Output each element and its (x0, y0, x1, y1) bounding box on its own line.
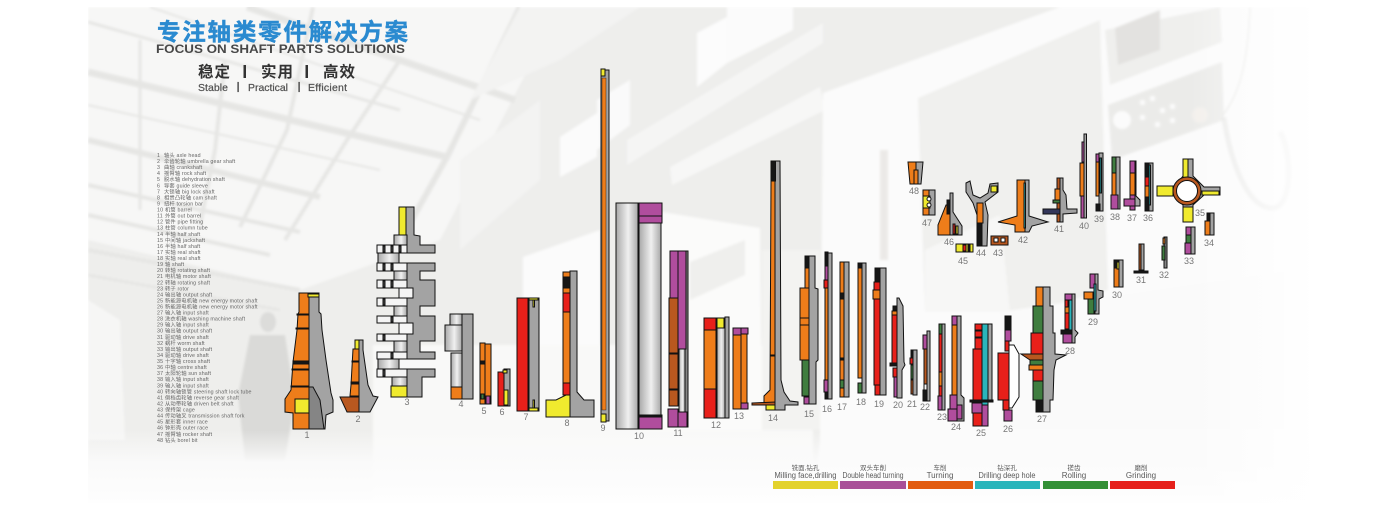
part 10: barrel (616, 203, 662, 441)
parts index list: 驱动轴 drive shaft (165, 333, 209, 341)
parts index list: 输入轴 input shaft (165, 309, 209, 317)
part 45: inner race (956, 244, 973, 266)
parts index list: 转轴 rotating shaft (165, 278, 210, 286)
parts index list: 5 (157, 177, 160, 183)
parts index list: 23 (157, 286, 163, 292)
parts index list: 6 (157, 183, 160, 189)
parts index list (157, 151, 258, 444)
parts index list: 摇臂轴 rock shaft (164, 169, 207, 177)
parts index list: 7 (157, 189, 160, 195)
parts index list: 25 (157, 298, 163, 304)
parts index list: 输出轴 output shaft (165, 290, 213, 298)
part 12: pipe fitting (704, 317, 729, 430)
part 43: cage: 43 (993, 248, 1003, 258)
parts index list: 轴头 axle head (164, 151, 201, 159)
part 41: reverse gear shaft (1043, 178, 1077, 234)
parts index list: 外筒 out barrel (165, 212, 201, 220)
slogan: English keywords: Efficient (308, 82, 347, 94)
legend item: drilling deep hole: 钻深孔 (997, 463, 1017, 472)
parts index list: 轴 shaft (165, 260, 185, 268)
slogan: Chinese keywords: 高效 (323, 62, 355, 81)
title: English heading: FOCUS ON SHAFT PARTS SOLUTIONS (156, 42, 405, 56)
part 24: output shaft (948, 316, 964, 432)
parts index list: 钟形壳 outer race (165, 424, 208, 432)
legend item: double head turning (840, 463, 906, 489)
title: Chinese heading: 专注轴类零件解决方案 (157, 18, 408, 45)
part 5: dehydration shaft: 5 (481, 406, 487, 416)
part 32: worm shaft (1159, 237, 1169, 280)
part 31: drive shaft: 31 (1136, 275, 1146, 285)
parts index list: 45 (157, 420, 163, 426)
part 25: new energy motor shaft (970, 324, 993, 438)
part 16: half shaft: 16 (822, 404, 832, 414)
part 29: input shaft: 29 (1088, 317, 1098, 327)
parts index list: 实轴 real shaft (165, 248, 201, 256)
parts index list: 输入轴 input shaft (165, 321, 209, 329)
legend: processing colours (773, 463, 1175, 489)
parts index list: 11 (157, 214, 163, 220)
legend item: rolling (1043, 463, 1108, 489)
part 40: steering shaft lock tube (1079, 134, 1089, 231)
slogan: Chinese keywords: 实用 (261, 62, 293, 81)
part 19: shaft: 19 (874, 399, 884, 409)
parts index list: 32 (157, 341, 163, 347)
parts index list: 18 (157, 256, 163, 262)
parts index list: 36 (157, 365, 163, 371)
part 3: crankshaft (377, 207, 435, 407)
parts index list: 29 (157, 323, 163, 329)
parts index list: 保持架 cage (165, 406, 195, 414)
part 47: rocker shaft (922, 190, 935, 228)
parts index list: 新能源电机轴 new energy motor shaft (165, 296, 258, 304)
parts index list: 转轴 rotating shaft (165, 266, 210, 274)
part 26: new energy motor shaft (998, 316, 1019, 434)
part 33: output shaft (1184, 227, 1195, 266)
parts index list: 摇臂轴 rocker shaft (165, 430, 213, 438)
parts index list: 10 (157, 208, 163, 214)
part 7: big lock shaft: 7 (523, 412, 529, 422)
part 18: real shaft: 18 (856, 397, 866, 407)
parts index list: 导套 guide sleeve (164, 181, 208, 189)
parts index list: 35 (157, 359, 163, 365)
parts index list: 管件 pipe fitting (165, 218, 203, 226)
legend item: milling face, drilling: Milling face,drilling (774, 471, 836, 480)
part 39: input shaft: 39 (1094, 214, 1104, 224)
parts index list: 37 (157, 371, 163, 377)
parts index list: 42 (157, 402, 163, 408)
part 31: drive shaft (1134, 244, 1148, 285)
parts index list: 新能源电机轴 new energy motor shaft (165, 302, 258, 310)
parts index list: 大锁轴 big lock shaft (164, 187, 215, 195)
slogan: English keywords: Practical (248, 82, 288, 94)
legend item: double head turning: Double head turning (842, 471, 904, 480)
part 46: outer race (938, 193, 962, 247)
slogan: Chinese keywords (198, 62, 355, 81)
parts index list: 3 (157, 165, 160, 171)
parts index list: 31 (157, 335, 163, 341)
part 44: transmission shaft fork (966, 181, 998, 258)
parts index list: 曲轴 crankshaft (164, 163, 203, 171)
parts index list: 机筒 barrel (165, 206, 192, 214)
part 10: barrel: 10 (634, 431, 644, 441)
legend item: rolling: 搓齿 (1068, 463, 1081, 472)
part 34: drive shaft (1204, 213, 1214, 248)
parts index list: 输出轴 output shaft (165, 345, 213, 353)
part 14: half shaft: 14 (768, 413, 778, 423)
part 32: worm shaft: 32 (1159, 270, 1169, 280)
legend item: turning: Turning (927, 471, 953, 480)
parts index list: 转向轴锁管 steering shaft lock tube (165, 387, 252, 395)
parts index list: 输入轴 input shaft (165, 381, 209, 389)
part 5: dehydration shaft (480, 343, 491, 416)
parts index list: 38 (157, 377, 163, 383)
parts index list: 2 (157, 159, 160, 165)
parts index list: 14 (157, 232, 163, 238)
part 45: inner race: 45 (958, 256, 968, 266)
part 36: centre shaft (1143, 163, 1153, 223)
parts index list: 47 (157, 432, 163, 438)
part 33: output shaft: 33 (1184, 256, 1194, 266)
parts index list: 倒档齿轮轴 reverse gear shaft (165, 393, 239, 401)
parts index list: 39 (157, 383, 163, 389)
part 38: input shaft (1110, 157, 1120, 222)
part 13: column tube (733, 328, 748, 421)
part 39: input shaft (1094, 153, 1104, 224)
parts index list: 20 (157, 268, 163, 274)
parts index list: 钻头 borel bit (165, 436, 198, 444)
parts index list: 16 (157, 244, 163, 250)
part 4: rock shaft (445, 314, 473, 409)
parts index list: 电机轴 motor shaft (165, 272, 211, 280)
part 8: cam shaft: 8 (564, 418, 570, 428)
parts index list: 22 (157, 280, 163, 286)
part 22: rotating shaft: 22 (920, 402, 930, 412)
part 13: column tube: 13 (734, 411, 744, 421)
part 18: real shaft (856, 263, 866, 407)
legend item: drilling deep hole (975, 463, 1040, 489)
part 17: real shaft (837, 262, 849, 412)
parts index list: 脱水轴 dehydration shaft (164, 175, 225, 183)
part 25: new energy motor shaft: 25 (976, 428, 986, 438)
parts index list: 输出轴 output shaft (165, 327, 213, 335)
part 27: input shaft: 27 (1037, 414, 1047, 424)
part 9: torsion bar (600, 69, 609, 433)
part 43: cage (991, 236, 1008, 258)
part 37: sun shaft (1124, 161, 1140, 223)
parts index list: 21 (157, 274, 163, 280)
parts index list: 星形套 inner race (165, 418, 208, 426)
parts index list: 1 (157, 153, 160, 159)
parts index list: 洗衣机轴 washing machine shaft (165, 315, 246, 323)
parts index list: 19 (157, 262, 163, 268)
parts index list: 实轴 real shaft (165, 254, 201, 262)
parts index list: 28 (157, 317, 163, 323)
legend item: drilling deep hole: Drilling deep hole (978, 471, 1036, 480)
part 2: umbrella gear shaft: 2 (355, 414, 361, 424)
parts index list: 4 (157, 171, 160, 177)
legend item: grinding: 磨削 (1134, 463, 1148, 472)
slogan: Chinese keywords: 稳定 (198, 62, 230, 81)
parts index list: 44 (157, 414, 163, 420)
parts index list: 转子 rotor (165, 284, 189, 292)
parts index list: 太阳轮轴 sun shaft (165, 369, 212, 377)
parts index list: 半轴 half shaft (165, 230, 201, 238)
part 46: outer race: 46 (944, 237, 954, 247)
part 28: washing machine shaft: 28 (1065, 346, 1075, 356)
part 21: motor shaft (907, 350, 917, 409)
part 48: borel bit: 48 (909, 186, 919, 196)
parts index list: 从动带轮轴 driven belt shaft (165, 400, 234, 408)
part 15: jackshaft: 15 (804, 409, 814, 419)
parts index list: 17 (157, 250, 163, 256)
part 27: input shaft (1021, 287, 1066, 424)
part 21: motor shaft: 21 (907, 399, 917, 409)
part 19: shaft (873, 268, 886, 409)
part 4: rock shaft: 4 (458, 399, 464, 409)
part 26: new energy motor shaft: 26 (1003, 424, 1013, 434)
part 37: sun shaft: 37 (1127, 213, 1137, 223)
parts index list: 输入轴 input shaft (165, 375, 209, 383)
part 2: umbrella gear shaft (340, 340, 378, 424)
part 8: cam shaft (546, 271, 594, 428)
parts index list: 半轴 half shaft (165, 242, 201, 250)
legend item: rolling: Rolling (1062, 471, 1086, 480)
part 23: rotor: 23 (937, 412, 947, 422)
part 35: cross shaft: 35 (1195, 208, 1205, 218)
part 35: cross shaft (1157, 159, 1220, 222)
part 42: driven belt shaft: 42 (1018, 235, 1028, 245)
part 47: rocker shaft: 47 (922, 218, 932, 228)
parts index list: 34 (157, 353, 163, 359)
parts index list: 43 (157, 408, 163, 414)
background: factory photo (88, 7, 1270, 460)
parts index list: 伞齿轮轴 umbrella gear shaft (164, 157, 236, 165)
slogan: English keywords: Stable (198, 82, 228, 94)
part 36: centre shaft: 36 (1143, 213, 1153, 223)
part 20: rotating shaft (890, 298, 905, 410)
parts index list: 40 (157, 389, 163, 395)
parts index list: 41 (157, 395, 163, 401)
part 22: rotating shaft (920, 331, 930, 412)
part 14: half shaft (752, 161, 798, 423)
parts index list: 46 (157, 426, 163, 432)
parts index list: 8 (157, 195, 160, 201)
part 28: washing machine shaft (1061, 294, 1078, 356)
parts index list: 26 (157, 304, 163, 310)
parts index list: 相贯凸轮轴 cam shaft (164, 193, 217, 201)
part 1: axle head (285, 293, 333, 440)
part 24: output shaft: 24 (951, 422, 961, 432)
part 7: big lock shaft (517, 298, 539, 422)
part 11: out barrel (668, 251, 688, 438)
parts index list: 扭杆 torsion bar (164, 200, 203, 208)
parts index list: 48 (157, 438, 163, 444)
part 30: output shaft: 30 (1112, 290, 1122, 300)
part 41: reverse gear shaft: 41 (1054, 224, 1064, 234)
parts index list: 中间轴 jackshaft (165, 236, 205, 244)
part 9: torsion bar: 9 (600, 423, 606, 433)
legend item: milling face, drilling: 铣面,钻孔 (792, 463, 820, 472)
part 16: half shaft (822, 252, 832, 414)
part 42: driven belt shaft (998, 180, 1048, 245)
parts index list: 十字轴 cross shaft (165, 357, 210, 365)
part 3: crankshaft: 3 (404, 397, 410, 407)
legend item: double head turning: 双头车削 (860, 463, 886, 472)
part 34: drive shaft: 34 (1204, 238, 1214, 248)
part 6: guide sleeve (498, 369, 510, 417)
part 20: rotating shaft: 20 (893, 400, 903, 410)
parts index list: 15 (157, 238, 163, 244)
part 44: transmission shaft fork: 44 (976, 248, 986, 258)
parts index list: 蜗杆 worm shaft (165, 339, 205, 347)
parts index list: 中轴 centre shaft (165, 363, 207, 371)
parts index list: 柱管 column tube (165, 224, 208, 232)
legend item: turning (908, 463, 973, 489)
parts index list: 13 (157, 226, 163, 232)
part 40: steering shaft lock tube: 40 (1079, 221, 1089, 231)
parts index list: 传动轴叉 transmission shaft fork (165, 412, 245, 420)
part 11: out barrel: 11 (673, 428, 683, 438)
legend item: turning: 车削 (934, 463, 946, 472)
parts index list: 27 (157, 311, 163, 317)
parts index list: 12 (157, 220, 163, 226)
parts index list: 驱动轴 drive shaft (165, 351, 209, 359)
parts index list: 33 (157, 347, 163, 353)
part 29: input shaft (1084, 274, 1103, 327)
part 23: rotor (937, 324, 947, 422)
slogan: English keywords (198, 82, 347, 94)
part 17: real shaft: 17 (837, 402, 847, 412)
parts index list: 24 (157, 292, 163, 298)
part 12: pipe fitting: 12 (711, 420, 721, 430)
part 6: guide sleeve: 6 (499, 407, 505, 417)
legend item: grinding: Grinding (1126, 471, 1156, 480)
parts index list: 30 (157, 329, 163, 335)
part 15: jackshaft (800, 256, 818, 419)
part 1: axle head: 1 (304, 430, 310, 440)
part 30: output shaft (1112, 260, 1123, 300)
legend item: grinding (1110, 463, 1175, 489)
part 48: borel bit (908, 162, 923, 196)
part 38: input shaft: 38 (1110, 212, 1120, 222)
legend item: milling face, drilling (773, 463, 838, 489)
parts index list: 9 (157, 202, 160, 208)
